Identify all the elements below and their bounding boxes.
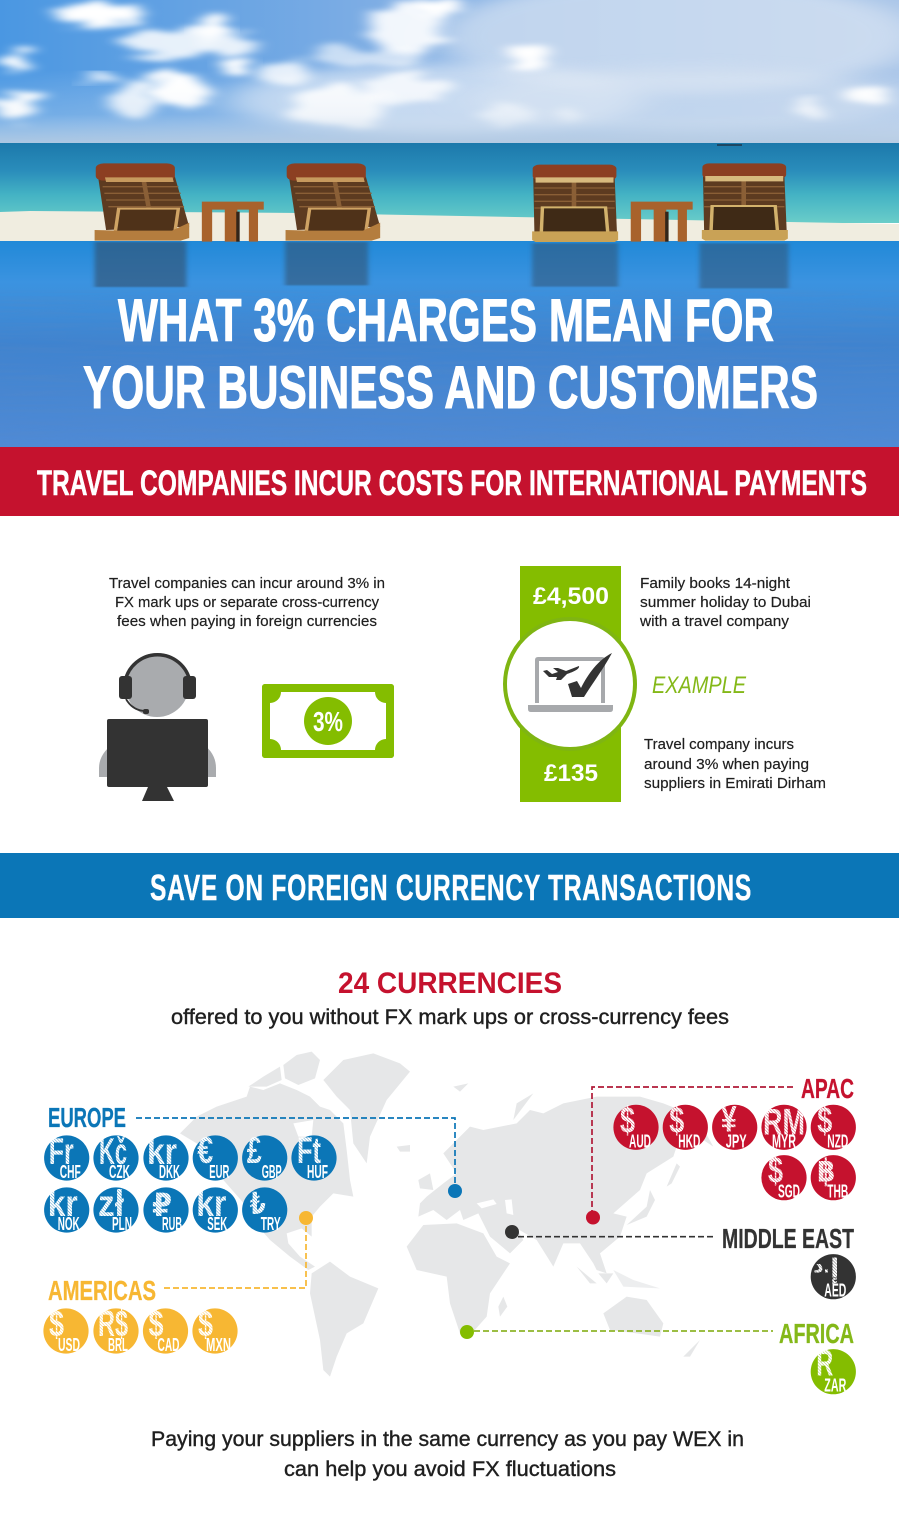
coin: ZAR: ZAR — [824, 1376, 846, 1396]
coin: THB: THB — [827, 1182, 848, 1202]
coin: CHF: Fr — [49, 1131, 74, 1172]
coin: THB — [811, 1153, 856, 1202]
text block: 3% FX mark ups: fees when paying in foreign currencies — [117, 613, 377, 630]
coin: SEK: kr — [196, 1183, 226, 1224]
coin: BRL — [93, 1303, 139, 1355]
coin: EUR: € — [197, 1130, 213, 1171]
icon: laptop with plane and check — [528, 653, 613, 712]
text block: travel company incurs: Travel company incurs — [644, 736, 794, 753]
coin: MXN: MXN — [206, 1335, 231, 1355]
coin: HKD: HKD — [678, 1131, 700, 1151]
coin: SGD — [761, 1150, 807, 1202]
text block: 3% FX mark ups: FX mark ups or separate cross-currency — [115, 594, 379, 611]
coin: ZAR: R — [816, 1343, 833, 1384]
coin: EUR: EUR — [209, 1162, 229, 1182]
region: Americas: AMERICAS — [48, 1275, 156, 1306]
closing statement: can help you avoid FX fluctuations — [284, 1458, 616, 1481]
text block: travel company incurs: around 3% when paying — [644, 756, 809, 773]
coin: CZK: CZK — [109, 1162, 130, 1182]
region: Europe — [44, 1102, 462, 1234]
coin: TRY: TRY — [261, 1214, 281, 1234]
coin: GBP: GBP — [262, 1162, 282, 1182]
text block: 3% FX mark ups — [109, 575, 385, 630]
icon: banknote 3% — [262, 684, 394, 758]
region: APAC: APAC — [801, 1073, 854, 1104]
coin: CHF: CHF — [60, 1162, 81, 1182]
coin: DKK: DKK — [159, 1162, 180, 1182]
coin: HKD — [663, 1099, 708, 1151]
coin: MXN — [192, 1303, 238, 1355]
icon: banknote 3%: 3% — [313, 706, 343, 737]
coin: AED: AED — [824, 1281, 846, 1301]
text block: family books: summer holiday to Dubai — [640, 594, 811, 611]
coin: SEK — [193, 1183, 238, 1234]
text block: family books: with a travel company — [639, 613, 789, 630]
coin: AUD: AUD — [629, 1131, 651, 1151]
coin: CZK: Kč — [99, 1131, 127, 1172]
coin: DKK — [143, 1131, 189, 1182]
coin: DKK: kr — [147, 1131, 177, 1172]
banner: travel companies — [0, 447, 899, 516]
coin: JPY: JPY — [726, 1131, 747, 1151]
coin: CAD: CAD — [158, 1335, 180, 1355]
coin: NZD: $ — [817, 1099, 833, 1140]
coin: NOK: kr — [48, 1183, 78, 1224]
coin: BRL: BRL — [108, 1335, 128, 1355]
coin: AED — [811, 1254, 856, 1301]
coin: MXN: $ — [198, 1303, 213, 1344]
coin: PLN — [93, 1183, 139, 1234]
coin: RUB: RUB — [162, 1214, 182, 1234]
coin: TRY — [242, 1187, 287, 1234]
region: Americas — [43, 1211, 313, 1355]
coin: NZD — [811, 1099, 856, 1151]
region: Europe: EUROPE — [48, 1102, 126, 1133]
closing statement — [151, 1428, 744, 1481]
coin: EUR — [193, 1130, 238, 1182]
text block: family books: Family books 14-night — [640, 575, 791, 592]
coin: CHF — [44, 1131, 89, 1182]
coin: USD — [43, 1303, 89, 1355]
hero photo: beach with loungers and infinity pool — [0, 0, 899, 447]
connector: Americas — [164, 1220, 306, 1288]
text block: 3% FX mark ups: Travel companies can incur around 3% in — [109, 575, 385, 592]
coin: PLN: PLN — [112, 1214, 132, 1234]
coin: RUB — [143, 1187, 189, 1234]
coin: AED: د. — [813, 1256, 829, 1278]
coin: AED: إ — [830, 1254, 839, 1285]
coin: ZAR — [811, 1343, 856, 1396]
coin: MYR: RM — [763, 1101, 805, 1142]
coin: MYR — [761, 1101, 807, 1151]
coin: USD: $ — [49, 1303, 64, 1344]
connector: Europe — [136, 1118, 455, 1190]
text block: family books — [639, 575, 811, 630]
closing statement: Paying your suppliers in the same currency as you pay WEX in — [151, 1428, 744, 1451]
world map — [180, 1052, 713, 1377]
connector: APAC — [592, 1087, 793, 1215]
region: Middle East — [505, 1223, 856, 1301]
title — [83, 287, 818, 421]
panel: example column: £135 — [544, 760, 598, 787]
coin: THB: ฿ — [817, 1153, 835, 1189]
coin: BRL: R$ — [98, 1303, 128, 1344]
region: Africa — [460, 1318, 856, 1396]
coin: HUF — [291, 1130, 337, 1182]
coin: CAD: $ — [148, 1303, 164, 1344]
panel: example column: £4,500 — [533, 583, 609, 610]
icon: call-centre agent at monitor — [99, 653, 216, 801]
coin: JPY — [712, 1098, 757, 1151]
coin: NZD: NZD — [827, 1131, 848, 1151]
heading: 24 currencies: 24 CURRENCIES — [338, 967, 562, 1000]
region: APAC — [586, 1073, 856, 1224]
label: example: EXAMPLE — [652, 672, 747, 699]
coin: CZK — [93, 1131, 139, 1182]
coin: USD: USD — [58, 1335, 80, 1355]
coin: JPY: ¥ — [721, 1098, 737, 1139]
coin: SGD: $ — [768, 1150, 783, 1191]
panel: example column — [505, 566, 635, 802]
coin: HUF: Ft — [297, 1130, 321, 1171]
banner: save on foreign currency — [0, 853, 899, 918]
coin: GBP — [242, 1130, 287, 1182]
region: Africa: AFRICA — [779, 1318, 854, 1349]
coin: RUB: ₽ — [152, 1187, 172, 1223]
coin: HUF: HUF — [307, 1162, 328, 1182]
text block: travel company incurs: suppliers in Emirati Dirham — [644, 775, 826, 792]
subheading: offered to you without FX mark ups or cross-currency fees — [171, 1006, 729, 1029]
text block: travel company incurs — [644, 736, 826, 792]
coin: CAD — [143, 1303, 188, 1355]
coin: PLN: zł — [98, 1183, 124, 1224]
coin: GBP: £ — [247, 1130, 262, 1171]
coin: AUD — [613, 1099, 659, 1151]
coin: MYR: MYR — [772, 1131, 796, 1151]
coin: SEK: SEK — [207, 1214, 227, 1234]
coin: AUD: $ — [620, 1099, 635, 1140]
coin: NOK — [44, 1183, 89, 1234]
coin: TRY: ₺ — [250, 1188, 266, 1221]
clouds — [0, 0, 899, 137]
coin: SGD: SGD — [778, 1182, 800, 1202]
connector: Africa — [474, 1330, 773, 1332]
connector: Middle East — [518, 1236, 714, 1238]
coin: NOK: NOK — [58, 1214, 80, 1234]
coin: HKD: $ — [669, 1099, 685, 1140]
